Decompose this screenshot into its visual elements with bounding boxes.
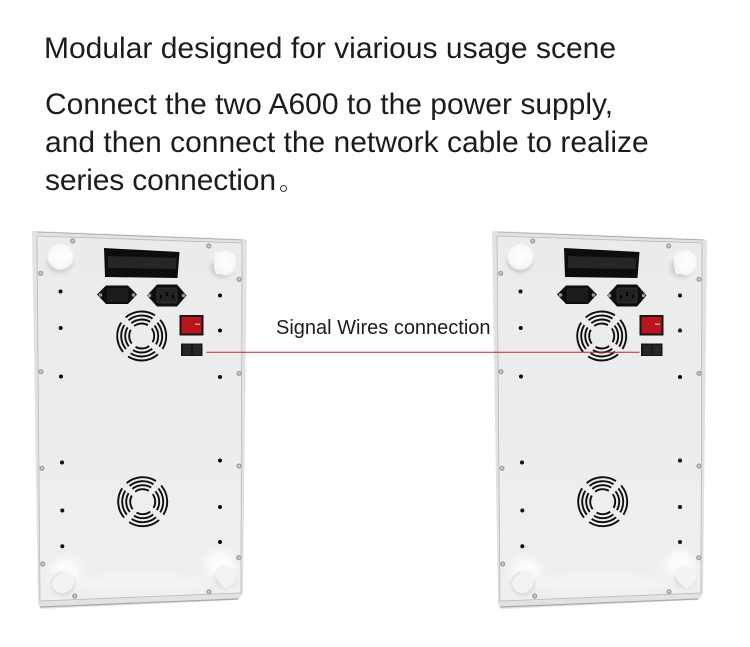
handle, sockets, power switch and signal port	[97, 248, 204, 356]
panel: right A600 rear view	[492, 231, 707, 609]
description text	[45, 88, 649, 197]
label: signal wires connection: Signal Wires connection	[276, 317, 491, 339]
description text: and then connect the network cable to realize	[45, 126, 649, 159]
rubber feet	[47, 244, 236, 596]
heading: Modular designed for viarious usage scene	[44, 32, 616, 65]
handle, sockets, power switch and signal port	[557, 248, 664, 356]
panel: left A600 rear view	[32, 231, 247, 609]
arrow: signal wire connection line	[206, 351, 640, 353]
icon: upper fan	[107, 301, 176, 371]
screws and mounting holes	[498, 238, 702, 599]
icon: lower fan	[108, 467, 177, 536]
rubber feet	[507, 244, 696, 596]
icon: lower fan	[568, 467, 637, 536]
icon: upper fan	[567, 301, 636, 371]
description text: Connect the two A600 to the power supply,	[45, 88, 613, 121]
screws and mounting holes	[38, 238, 242, 599]
description text: series connection	[45, 164, 276, 197]
